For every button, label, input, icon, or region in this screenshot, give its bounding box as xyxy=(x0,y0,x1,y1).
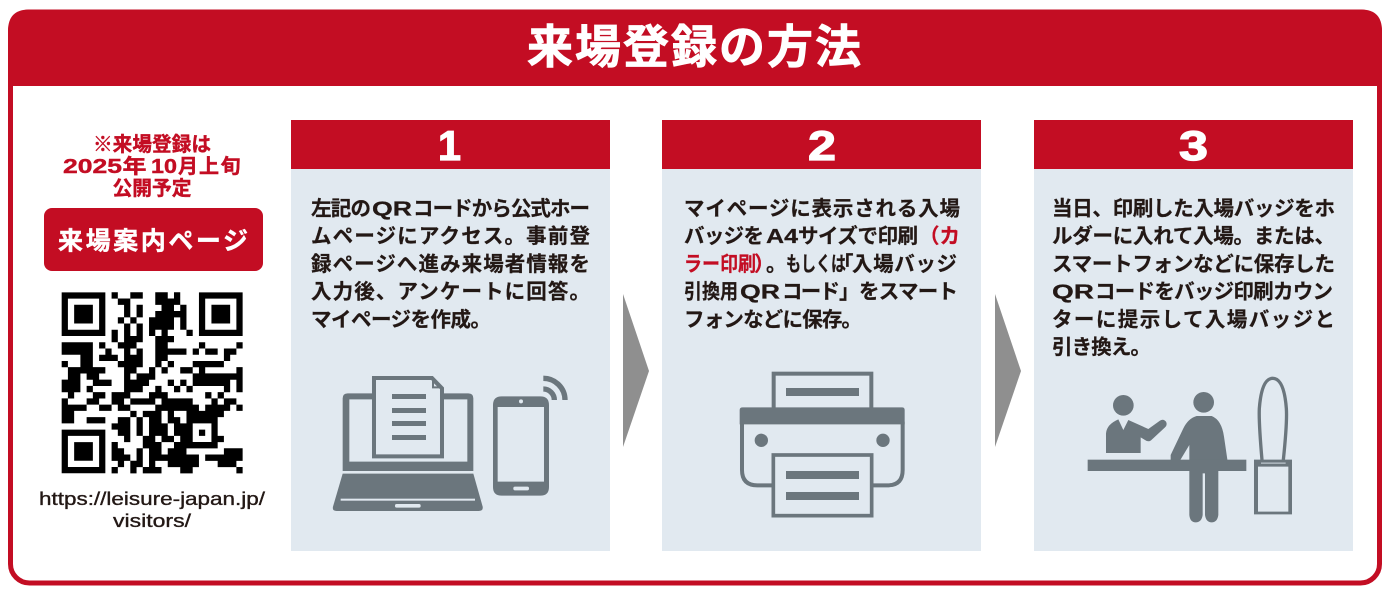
url xyxy=(39,489,265,531)
step 1 header: 1 xyxy=(438,122,461,169)
step 2 text: コード xyxy=(782,280,840,304)
notice text xyxy=(63,133,240,200)
step 2 header xyxy=(662,120,981,169)
step 2 text: ラー印刷 xyxy=(684,253,756,276)
step 2 text: フォンなどに保存。 xyxy=(684,308,862,332)
notice text: ※来場登録は xyxy=(93,133,211,156)
arrow 1 to 2 xyxy=(623,294,649,447)
step 2 text: をスマート xyxy=(859,280,958,304)
step 2 text: 引換用 xyxy=(684,280,738,304)
button: visitor page: 来場案内ページ xyxy=(58,228,248,256)
arrow 2 to 3 xyxy=(995,294,1021,447)
step 3 text: QR xyxy=(1052,280,1094,304)
button: visitor page xyxy=(44,208,263,271)
step 2 text: QR xyxy=(740,280,780,304)
step 2 text: サイズで印刷 xyxy=(798,224,918,248)
QR code xyxy=(62,295,243,470)
step 2 text: A4 xyxy=(766,225,799,248)
url: visitors/ xyxy=(113,511,191,531)
step 2 text: マイページに表示される入場 xyxy=(684,198,960,220)
step 3 text: 当日、印刷した入場バッジをホ xyxy=(1052,198,1335,220)
step 1 header xyxy=(291,120,610,169)
step 1 text: マイページを作成。 xyxy=(311,308,491,332)
notice text: 月 xyxy=(178,156,198,178)
step 3 text: スマートフォンなどに保存した xyxy=(1052,253,1335,276)
title: 来場登録の方法 xyxy=(527,21,861,73)
step 1 text: ムページにアクセス。事前登 xyxy=(311,225,590,248)
panel: step 3 xyxy=(1034,120,1353,551)
step 1 text: QR xyxy=(372,198,412,220)
notice text: 10 xyxy=(151,156,177,178)
step 3 header xyxy=(1034,120,1353,169)
step 3 text: ターに提示して入場バッジと xyxy=(1052,308,1335,332)
step 2 text: もしくは xyxy=(786,253,846,276)
header band xyxy=(8,10,1382,86)
step 1 text: 録ページへ進み来場者情報を xyxy=(311,253,590,276)
step 1 text xyxy=(311,198,590,332)
notice text: 年 xyxy=(122,155,146,178)
step 2 text: 」 xyxy=(839,280,860,304)
step 1 text: 入力後、アンケートに回答。 xyxy=(311,280,590,304)
step 3 text: 引き換え。 xyxy=(1052,336,1151,359)
step 3 text: ルダーに入れて入場。または、 xyxy=(1052,224,1335,248)
step 2 text: ） xyxy=(754,253,774,276)
panel: step 1 xyxy=(291,120,610,551)
panel: step 2 xyxy=(662,120,981,551)
step 3 header: 3 xyxy=(1179,122,1208,169)
step 3 text xyxy=(1052,198,1335,359)
url: https://leisure-japan.jp/ xyxy=(39,489,265,509)
panel: left QR column xyxy=(39,133,265,531)
step 2 text: （カ xyxy=(919,225,960,248)
notice text: 公開予定 xyxy=(112,177,192,200)
step 2 text xyxy=(684,198,960,332)
notice text: 上 xyxy=(199,155,219,178)
step 2 text: 。 xyxy=(766,253,786,276)
step 3 text: コードをバッジ印刷カウン xyxy=(1095,280,1333,304)
step 2 text: 入場バッジ xyxy=(852,253,957,276)
step 1 text: コードから公式ホー xyxy=(413,198,590,220)
step 1 text: 左記の xyxy=(311,198,371,220)
step 2 text: 「 xyxy=(833,253,854,276)
step 2 header: 2 xyxy=(808,122,836,169)
notice text: 旬 xyxy=(220,155,240,178)
notice text: 2025 xyxy=(63,156,122,178)
icon: laptop with document and smartphone xyxy=(333,378,565,511)
icon: printer xyxy=(740,374,905,516)
step 2 text: バッジを xyxy=(684,225,764,248)
icon: reception desk with badge xyxy=(1088,378,1292,522)
